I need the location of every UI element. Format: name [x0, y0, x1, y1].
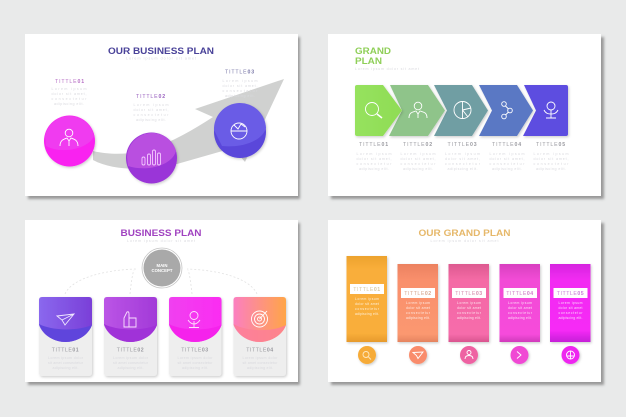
labels: grand plan steps: adipiscing elit. — [492, 167, 522, 171]
card 04: Lorem ipsum dolor — [242, 356, 278, 360]
labels: grand plan steps: dolor sit amet, — [400, 157, 436, 161]
bar 03: Lorem ipsum — [457, 301, 481, 305]
card 04: sit amet consectetur — [242, 361, 278, 365]
card 01: Lorem ipsum dolor — [48, 356, 84, 360]
icon: plant — [544, 102, 558, 118]
bar 02: TITTLE02 — [404, 291, 432, 297]
text block: title 01: dolor sit amet, — [52, 92, 86, 96]
labels: grand plan steps: Lorem ipsum — [400, 152, 436, 156]
labels: grand plan steps: consectetur — [356, 162, 392, 166]
text block: title 02: dolor sit amet, — [134, 108, 168, 112]
arrow 2 — [389, 85, 445, 136]
bar 04 — [500, 264, 540, 342]
text block: title 02 — [134, 94, 169, 122]
card 01: adipiscing elit. — [52, 366, 78, 370]
bar 01: consectetur — [355, 307, 380, 311]
icon: person — [409, 102, 427, 118]
labels: grand plan steps: Lorem ipsum — [356, 152, 392, 156]
panel: grand plan — [328, 34, 604, 199]
subtitle: business plan: Lorem ipsum dolor sit amet — [127, 239, 195, 243]
panel: our business plan — [25, 34, 300, 199]
heading: our business plan: OUR BUSINESS PLAN — [108, 46, 214, 56]
icon: plant — [188, 312, 200, 328]
card 02 — [104, 297, 157, 376]
text block: title 03: TITTLE03 — [225, 70, 255, 76]
bar 05 — [550, 264, 590, 342]
card 02: TITTLE02 — [117, 348, 144, 354]
card 02: adipiscing elit. — [118, 366, 144, 370]
text block: title 02: adipiscing elit. — [136, 118, 166, 122]
icon: thumbs up — [124, 312, 136, 327]
text block: title 01 — [52, 79, 87, 106]
text block: title 01: adipiscing elit. — [54, 102, 84, 106]
labels: grand plan steps: Lorem ipsum — [445, 152, 480, 156]
labels: grand plan steps: adipiscing elit. — [403, 167, 433, 171]
bar 01 — [346, 256, 387, 342]
arrow 3 — [434, 85, 488, 136]
arrow 4 — [479, 85, 533, 136]
labels: grand plan steps: consectetur — [445, 162, 481, 166]
circle: person — [44, 116, 95, 166]
bar 04: adipiscing elit. — [508, 316, 532, 320]
main concept circle — [142, 248, 182, 288]
bar 02: Lorem ipsum — [406, 301, 430, 305]
heading: business plan: BUSINESS PLAN — [120, 228, 202, 238]
labels: grand plan steps: dolor sit amet, — [445, 157, 480, 161]
bar 03: dolor sit amet — [457, 306, 481, 310]
bar 02: dolor sit amet — [406, 306, 430, 310]
card 04 — [234, 297, 286, 376]
bar 05: dolor sit amet — [558, 306, 583, 310]
bar 01: TITTLE01 — [353, 287, 381, 293]
arrow 1 — [355, 85, 402, 136]
text block: title 01: Lorem ipsum — [52, 87, 86, 91]
bar 01: Lorem ipsum — [355, 297, 379, 301]
icon: magnifier — [366, 102, 382, 118]
panel: our grand plan — [328, 220, 604, 385]
bar 03: adipiscing elit. — [457, 316, 481, 320]
card 02: Lorem ipsum dolor — [113, 356, 149, 360]
subtitle: grand plan: Lorem ipsum dolor sit amet — [355, 67, 419, 71]
text block: title 03: Lorem ipsum — [222, 79, 258, 83]
icon circle: person — [460, 346, 478, 364]
bar 03 — [448, 264, 489, 342]
labels: grand plan steps: adipiscing elit. — [359, 167, 389, 171]
bar 05: Lorem ipsum — [558, 301, 583, 305]
bar 02: adipiscing elit. — [406, 316, 430, 320]
labels: grand plan steps: dolor sit amet, — [490, 157, 524, 161]
panel: business plan — [25, 220, 300, 385]
bar 01: adipiscing elit. — [355, 312, 379, 316]
arrow: growth — [93, 79, 284, 169]
labels: grand plan steps: TITTLE02 — [403, 142, 433, 148]
labels: grand plan steps: adipiscing elit. — [536, 167, 566, 171]
labels: grand plan steps: consectetur — [400, 162, 436, 166]
connectors: dashed lines — [65, 269, 257, 294]
card 01 — [39, 297, 92, 376]
text block: title 02: TITTLE02 — [136, 94, 166, 100]
icon: nodes — [502, 102, 512, 119]
labels: grand plan steps: dolor sit amet, — [356, 157, 392, 161]
bar 03: TITTLE03 — [455, 291, 483, 297]
labels: grand plan steps: Lorem ipsum — [490, 152, 524, 156]
heading: grand plan: GRAND — [355, 46, 392, 56]
text block: title 02: consectetur — [134, 113, 169, 117]
main concept circle: MAIN — [157, 263, 167, 268]
card 03: Lorem ipsum dolor — [178, 356, 213, 360]
bar 04: TITTLE04 — [506, 291, 534, 297]
card 01: sit amet consectetur — [48, 361, 84, 365]
icon circle: nodes — [510, 346, 528, 364]
card 03 — [169, 297, 222, 376]
icon circle: magnifier — [358, 346, 376, 364]
circle: bar chart — [126, 132, 177, 184]
labels: grand plan steps: TITTLE03 — [448, 142, 477, 148]
text block: title 02: Lorem ipsum — [134, 103, 168, 107]
bar 05: consectetur — [558, 311, 583, 315]
text block: title 03: adipiscing elit. — [225, 94, 255, 98]
icon circle: paper plane — [409, 346, 427, 364]
text block: title 01: TITTLE01 — [55, 79, 85, 85]
bar 04: consectetur — [508, 311, 533, 315]
icon: target — [252, 311, 268, 327]
bar 05: adipiscing elit. — [558, 316, 583, 320]
bar 03: consectetur — [457, 311, 482, 315]
heading: grand plan — [355, 46, 392, 66]
labels: grand plan steps: dolor sit amet, — [534, 157, 568, 161]
bar 05: TITTLE05 — [557, 291, 584, 297]
main concept circle: CONCEPT — [151, 268, 173, 273]
bar 01: dolor sit amet — [355, 302, 379, 306]
labels: grand plan steps: consectetur — [490, 162, 525, 166]
bar 04: dolor sit amet — [508, 306, 532, 310]
labels: grand plan steps: TITTLE04 — [492, 142, 522, 148]
text block: title 03: consectetur — [222, 89, 258, 93]
labels: grand plan steps: TITTLE05 — [536, 142, 566, 148]
card 03: sit amet consectetur — [178, 361, 213, 365]
subtitle: our business plan: Lorem ipsum dolor sit amet — [126, 56, 196, 60]
bar 04: Lorem ipsum — [508, 301, 532, 305]
text block: title 03: dolor sit amet, — [222, 84, 258, 88]
heading: our grand plan: OUR GRAND PLAN — [418, 228, 510, 238]
labels: grand plan steps: adipiscing elit. — [448, 167, 478, 171]
card 02: sit amet consectetur — [113, 361, 149, 365]
labels: grand plan steps — [356, 142, 569, 171]
labels: grand plan steps: Lorem ipsum — [534, 152, 568, 156]
circle: pie chart — [214, 103, 266, 158]
card 04: adipiscing elit. — [247, 366, 273, 370]
subtitle: our grand plan: Lorem ipsum dolor sit amet — [430, 239, 498, 243]
arrow 5 — [523, 85, 568, 136]
labels: grand plan steps: TITTLE01 — [359, 142, 389, 148]
card 03: TITTLE03 — [181, 348, 209, 354]
bar 02: consectetur — [406, 311, 431, 315]
icon circle: plant — [562, 346, 580, 364]
bar 02 — [398, 264, 438, 342]
card 04: TITTLE04 — [246, 348, 274, 354]
card 03: adipiscing elit. — [182, 366, 208, 370]
icon: pie chart — [454, 102, 471, 118]
text block: title 01: consectetur — [52, 97, 87, 101]
labels: grand plan steps: consectetur — [534, 162, 569, 166]
card 01: TITTLE01 — [52, 348, 79, 354]
heading: grand plan: PLAN — [355, 56, 382, 66]
icon: paper plane — [57, 314, 74, 325]
text block: title 03 — [222, 70, 258, 98]
